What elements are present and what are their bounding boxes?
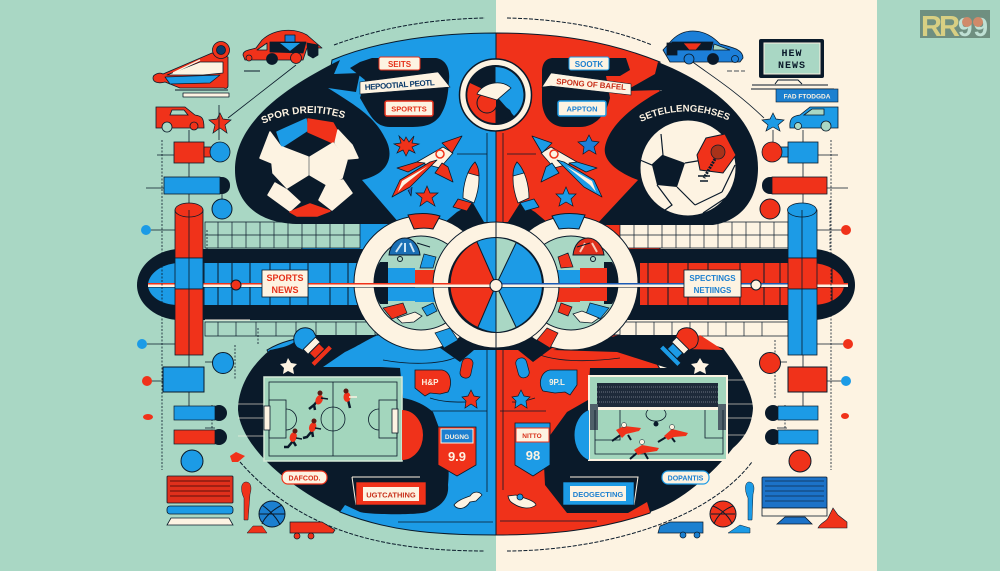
top centre emblem (460, 59, 532, 131)
label: left banner: UGTCATHING (366, 490, 416, 500)
icon: blue helmet (389, 238, 430, 262)
thin guide lines on lower panels (383, 133, 620, 522)
label: sports news plate: SPORTS (266, 273, 304, 283)
badge: right score shield: NITTO (522, 433, 542, 440)
label: right banner (563, 477, 638, 505)
icon: left truck (290, 522, 335, 539)
panel: upper right dark blob with football (596, 62, 758, 225)
dark underlay behind rings (436, 203, 556, 362)
left side ring (354, 214, 488, 350)
label: sports news plate (262, 270, 308, 297)
panel: upper right speech blob (542, 58, 630, 127)
label: right banner: DEOGECTING (573, 490, 623, 499)
label: left pill: DAFCOD. (289, 476, 320, 482)
icon: news monitor: NEWS (778, 61, 806, 72)
heading: left title: SPOR DREITITES (261, 106, 346, 123)
icon: small blue car (790, 107, 838, 131)
icon: red helmet (573, 238, 604, 262)
cream ticks beside pitch and goal (238, 380, 753, 436)
chart: goal scene (589, 376, 727, 460)
icon: right truck (658, 522, 703, 538)
watermark logo: RR (921, 11, 960, 43)
right column: red circle (760, 199, 780, 219)
right column: blue box with red circle (762, 142, 818, 163)
panel: left coloured oval lower (267, 335, 496, 535)
red triangle beside right spotlight (683, 335, 723, 350)
icon: left spoon (242, 482, 251, 520)
left column: lower blue circle (212, 352, 234, 374)
icon: handshake (573, 311, 599, 323)
icon: right rocket (532, 136, 602, 197)
label: appton: APPTON (566, 104, 598, 114)
upper left labels (360, 57, 450, 116)
icon: players (612, 426, 688, 459)
heading: right title: SETELLENGEHSES (639, 104, 730, 122)
panel: lower right dark blob with goal (543, 335, 753, 513)
right column: red bar (762, 177, 827, 194)
left column: blue circle (212, 199, 232, 219)
left column: bars (174, 405, 227, 445)
label: ribbon: SPONG OF BAFEL (556, 77, 626, 92)
label: blue ticker: FAD FTODGDA (784, 94, 831, 100)
right column dots (841, 225, 853, 419)
badge: left score shield: DUGNG (445, 434, 469, 441)
icon: right football (640, 120, 736, 216)
left column: blue box (163, 367, 204, 392)
label: left pill (282, 471, 327, 484)
icon: right shoe (818, 508, 847, 528)
label: seits: SEITS (388, 60, 412, 69)
panel: right coloured oval lower (496, 335, 690, 535)
label: blue ticker (776, 89, 838, 102)
stars (209, 113, 784, 462)
right side ring (504, 214, 638, 350)
callout: left speech bubble (415, 370, 450, 396)
central band (137, 249, 855, 320)
label: left banner (352, 477, 426, 505)
central wheel (433, 222, 559, 348)
left column: cylinder (175, 203, 203, 355)
callout: right speech bubble (540, 370, 577, 395)
label: spectinge netings plate: NETIINGS (694, 286, 732, 295)
icon: small red car (156, 107, 204, 132)
pills below rings (459, 357, 530, 379)
icon: news monitor: HEW (781, 49, 803, 60)
badge: left score shield: 9.9 (448, 449, 466, 464)
icon: left cone (247, 526, 267, 533)
icon: handshake (397, 312, 422, 323)
right column: bars (765, 405, 818, 445)
badge: right score shield: 98 (526, 448, 540, 463)
panel: left coloured oval upper (300, 33, 496, 260)
right column: cylinder (788, 203, 817, 355)
icon: spotlight left (288, 322, 332, 366)
callout: right speech bubble: 9P.L (549, 378, 565, 387)
right connector lines (770, 130, 848, 470)
icon: left desktop computer (167, 476, 233, 525)
watermark logo: 99 (958, 12, 988, 42)
centre axis line and hub (148, 280, 848, 292)
icon: left football (260, 119, 358, 216)
icon: right cone (728, 525, 750, 533)
icon: right spoon (745, 482, 754, 520)
decorative dashed arcs (228, 18, 764, 551)
label: spectinge netings plate: SPECTINGS (689, 274, 736, 283)
label: ribbon: HEPOOTIAL PEOTL (365, 78, 435, 92)
left connector lines (146, 105, 258, 470)
badge: right score shield (515, 423, 550, 476)
icon: top left van (243, 30, 322, 71)
left column: lower circle (181, 450, 203, 472)
icon: news monitor (751, 39, 834, 89)
icon: right small rocket (513, 162, 539, 211)
semicircle beside goal (574, 410, 589, 460)
panel: lower left dark blob with pitch (238, 335, 449, 514)
icon: left rocket (392, 136, 462, 197)
semicircle beside pitch (402, 410, 423, 460)
icon: train shoe (153, 42, 230, 97)
icon: top right van (663, 31, 745, 71)
chart: football pitch (264, 377, 402, 461)
left column: red box with blue circle (174, 142, 230, 163)
icon: left small rocket (453, 162, 479, 211)
icon: right basketball (710, 501, 736, 527)
panel: upper left dark blob with football (235, 60, 400, 224)
label: spectinge netings plate (684, 270, 741, 297)
upper right labels (542, 57, 631, 116)
right column: lower red circle (760, 352, 780, 374)
label: soot: SOOTK (575, 60, 603, 69)
icons: small handshakes lower (454, 492, 536, 508)
callout: left speech bubble: H&P (422, 378, 439, 387)
left column dots (137, 225, 153, 420)
right column: lower circle (789, 450, 811, 472)
label: right pill: DOPANTIS (668, 476, 704, 482)
label: sports news plate: NEWS (272, 285, 298, 295)
label: sportts: SPORTTS (391, 104, 427, 114)
panel: right coloured oval upper (496, 33, 660, 250)
icon: spotlight right (660, 322, 704, 366)
icon: left basketball (259, 501, 285, 527)
watermark logo (920, 10, 990, 43)
badge: left score shield (438, 427, 476, 476)
label: right pill (662, 471, 709, 484)
icon: right desktop computer (762, 477, 827, 524)
left column: blue bar (164, 177, 230, 194)
panel: grids around central band (205, 222, 788, 336)
right column: red box (788, 367, 827, 392)
icon: players (284, 388, 357, 447)
panel: upper left speech blob (350, 58, 449, 127)
